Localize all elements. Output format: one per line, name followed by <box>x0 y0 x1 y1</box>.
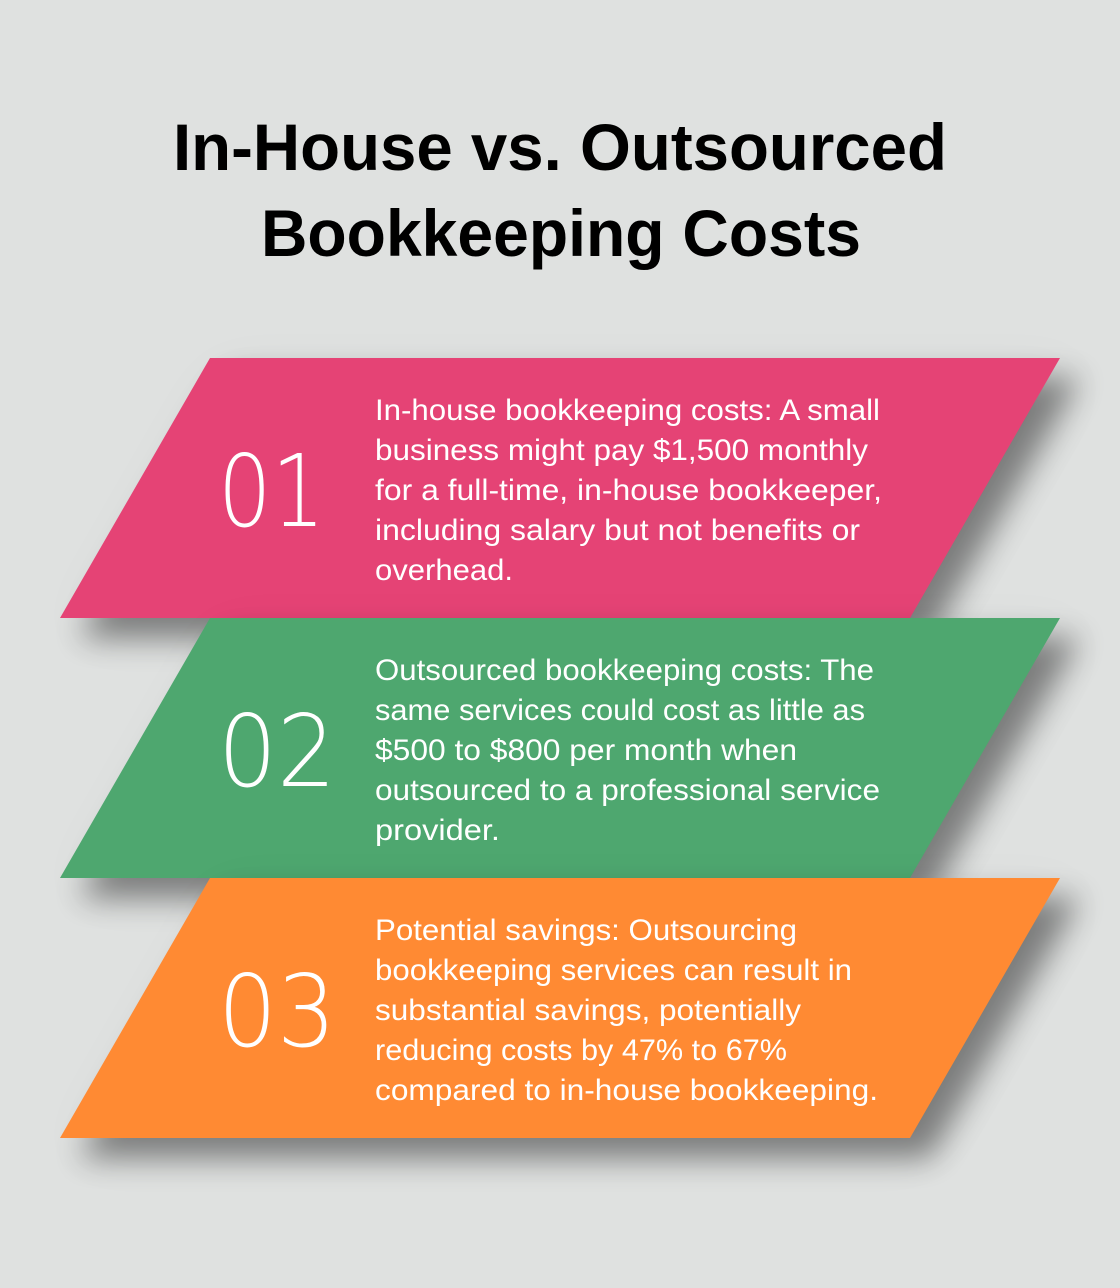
text: savings description: Potential savings: Outsourcing <box>375 914 797 947</box>
panel: potential savings <box>60 878 1080 1158</box>
text: savings description <box>375 914 878 1107</box>
text: in-house description: including salary but not benefits or <box>375 514 860 547</box>
text: outsourced description: provider. <box>375 814 500 847</box>
text: in-house description: overhead. <box>375 554 513 587</box>
text: outsourced description: outsourced to a professional service <box>375 774 880 807</box>
text: in-house description: business might pay $1,500 monthly <box>375 434 868 467</box>
title: In-House vs. Outsourced <box>173 110 947 184</box>
panel: outsourced costs <box>60 618 1080 898</box>
text: in-house description <box>375 394 882 587</box>
text: savings description: substantial savings, potentially <box>375 994 801 1027</box>
text: outsourced description: $500 to $800 per month when <box>375 734 797 767</box>
title: Bookkeeping Costs <box>261 196 861 270</box>
title <box>173 110 947 270</box>
text: outsourced description: Outsourced bookkeeping costs: The <box>375 654 874 687</box>
text: savings description: compared to in-house bookkeeping. <box>375 1074 878 1107</box>
text: outsourced description: same services could cost as little as <box>375 694 865 727</box>
panel: in-house costs <box>60 358 1080 638</box>
text: savings description: bookkeeping services can result in <box>375 954 852 987</box>
text: in-house description: In-house bookkeeping costs: A small <box>375 394 880 427</box>
text: in-house description: for a full-time, in-house bookkeeper, <box>375 474 882 507</box>
number 01: 01 <box>218 433 325 550</box>
number 02: 02 <box>218 693 336 810</box>
text: savings description: reducing costs by 47% to 67% <box>375 1034 787 1067</box>
number 03: 03 <box>218 953 336 1070</box>
text: outsourced description <box>375 654 880 847</box>
